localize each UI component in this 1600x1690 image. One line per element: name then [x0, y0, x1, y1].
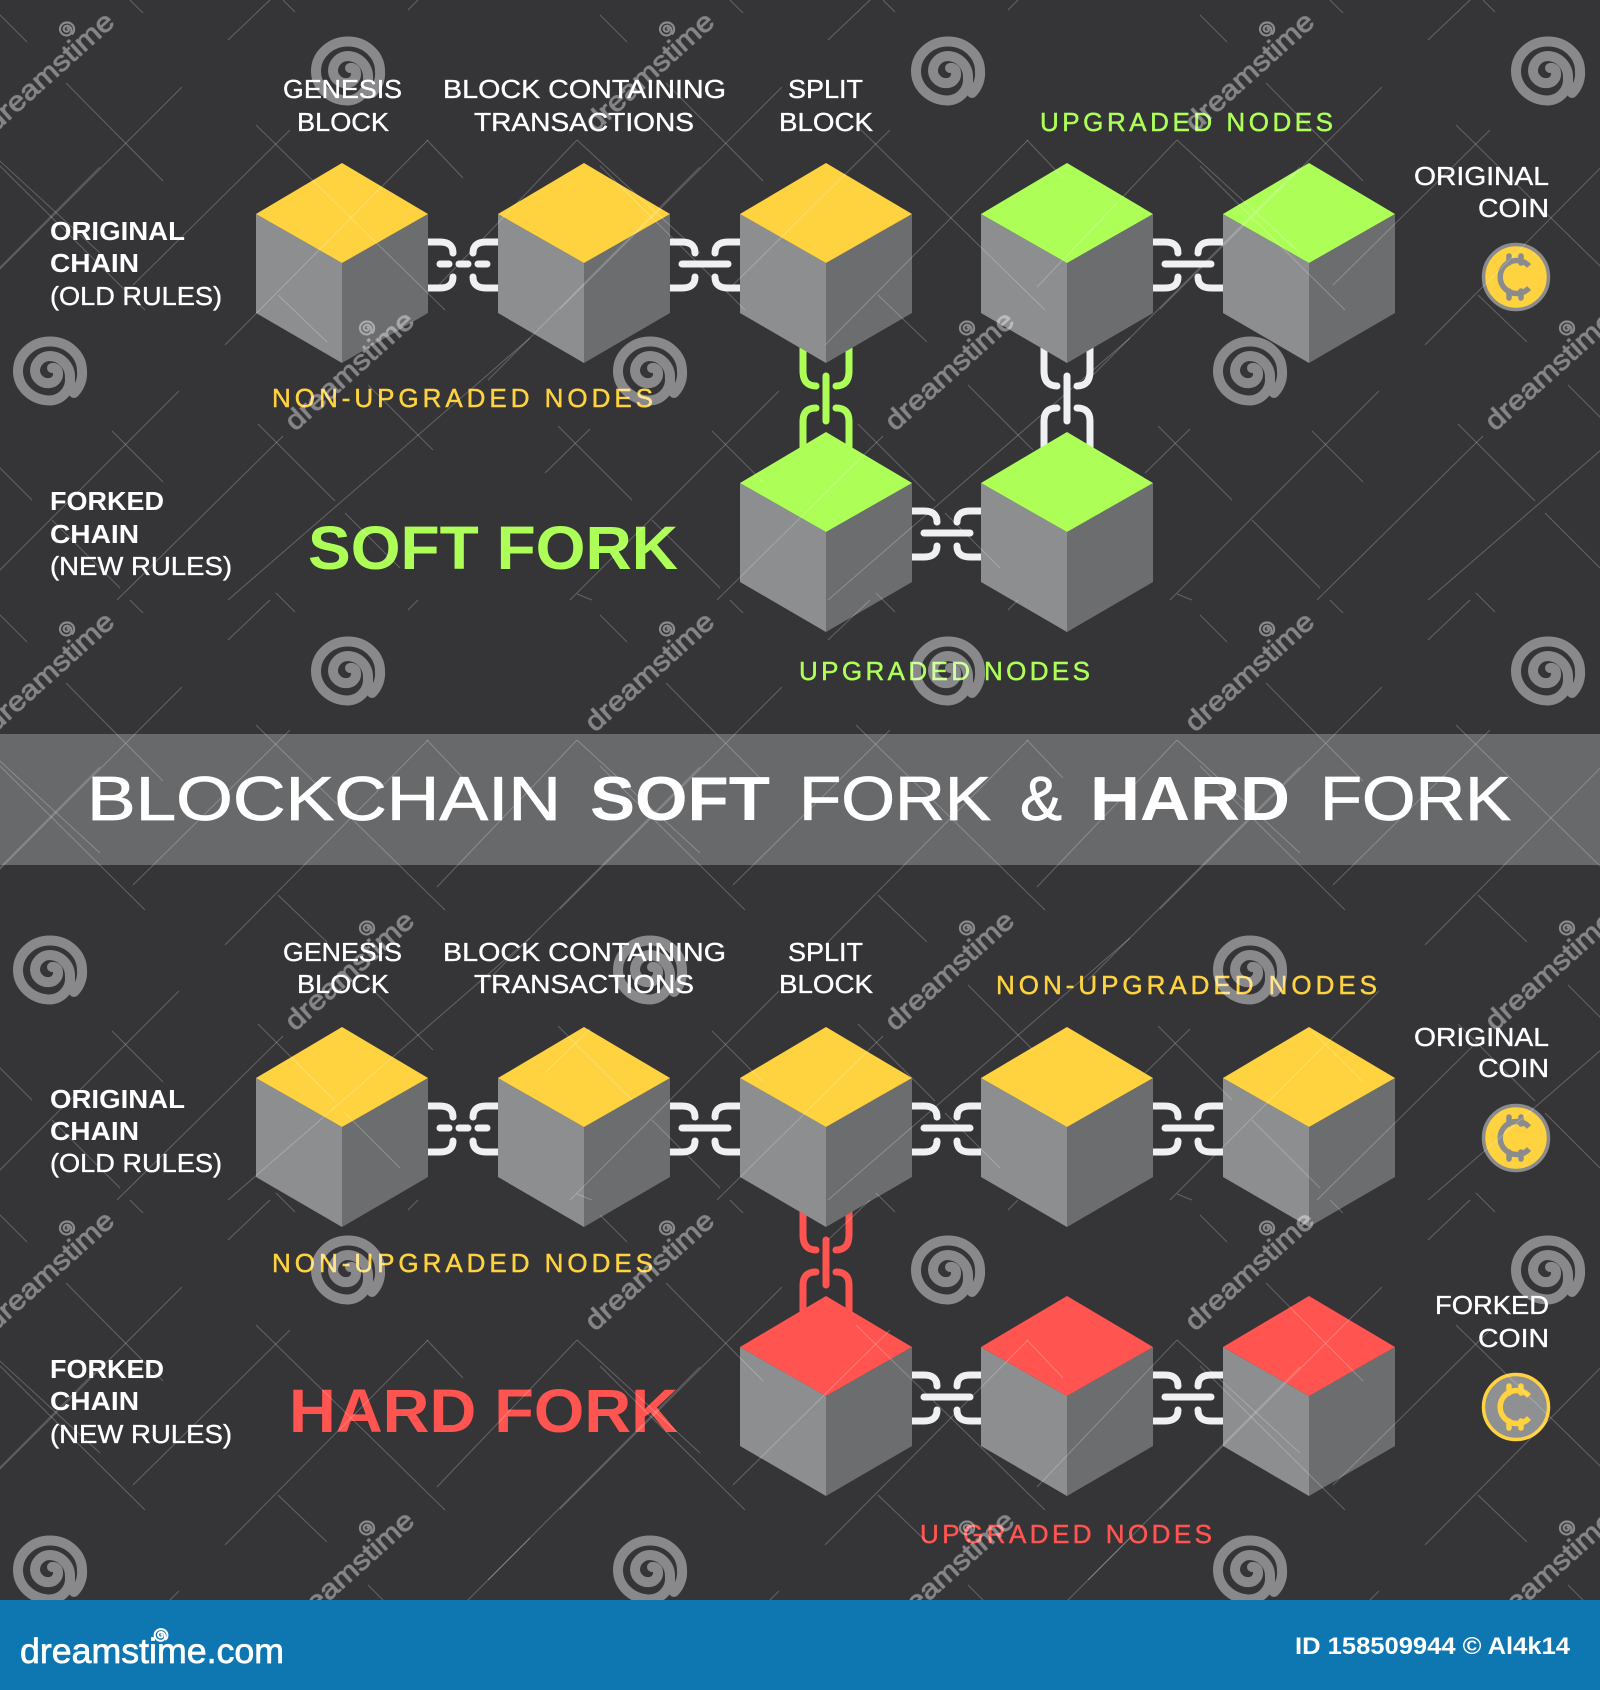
- coin label: original coin, soft fork: COIN: [1478, 195, 1549, 223]
- coin label: original coin, soft fork: ORIGINAL: [1414, 163, 1549, 191]
- watermark overlay: dreamstime: [1178, 1204, 1320, 1336]
- row label: original chain, hard fork: (OLD RULES): [50, 1150, 222, 1178]
- row label: forked chain, soft fork: CHAIN: [50, 521, 139, 549]
- row label: original chain, soft fork: ORIGINAL: [50, 218, 185, 246]
- column labels: soft fork: GENESIS: [283, 76, 402, 104]
- heading: soft fork: SOFT FORK: [308, 514, 678, 582]
- watermark overlay: dreamstime: [578, 1204, 720, 1336]
- title: [87, 765, 1511, 834]
- column labels: hard fork: GENESIS: [283, 939, 402, 967]
- node label: upgraded nodes bottom, soft fork: UPGRADED NODES: [799, 656, 1090, 686]
- watermark overlay: dreamstime: [1178, 5, 1320, 137]
- diagram: hard fork: [256, 1027, 1395, 1496]
- cubes: forked chain, soft fork: [740, 432, 1153, 632]
- row label: original chain, hard fork: ORIGINAL: [50, 1086, 185, 1114]
- title: HARD: [1090, 765, 1290, 834]
- watermark overlay: dreamstime: [578, 5, 720, 137]
- icon: original coin, hard fork: [1484, 1106, 1548, 1170]
- cubes: forked chain, hard fork: [740, 1296, 1395, 1496]
- title band: [0, 734, 1600, 865]
- column labels: soft fork: BLOCK: [297, 109, 389, 137]
- icon: original coin, soft fork: [1484, 244, 1548, 310]
- watermark overlay: dreamstime: [878, 1504, 1020, 1636]
- diagram: soft fork: [256, 163, 1395, 632]
- chain links: soft fork: [426, 242, 1225, 557]
- column labels: hard fork: BLOCK: [297, 971, 389, 999]
- watermark overlay: dreamstime: [878, 904, 1020, 1036]
- footer logo: dreamstime.com: [20, 1632, 284, 1671]
- node label: upgraded nodes, hard fork: UPGRADED NODES: [920, 1519, 1212, 1549]
- coin label: forked coin: [1435, 1292, 1549, 1353]
- icon: forked coin: [1484, 1374, 1548, 1440]
- cubes: original chain, hard fork: [256, 1027, 1395, 1227]
- row label: forked chain, hard fork: [50, 1356, 232, 1449]
- column labels: soft fork: SPLIT: [788, 76, 863, 104]
- row label: original chain, hard fork: CHAIN: [50, 1118, 139, 1146]
- cubes: original chain, soft fork: [256, 163, 1395, 363]
- coin label: original coin, hard fork: [1414, 1024, 1549, 1083]
- coin label: original coin, hard fork: ORIGINAL: [1414, 1024, 1549, 1052]
- title: SOFT: [590, 765, 770, 834]
- column labels: hard fork: SPLIT: [788, 939, 863, 967]
- row label: original chain, soft fork: [50, 218, 222, 311]
- title: &: [1020, 765, 1062, 834]
- node label: non-upgraded nodes, soft fork: NON-UPGRADED NODES: [272, 383, 653, 413]
- column labels: soft fork: BLOCK CONTAINING: [443, 76, 726, 104]
- row label: original chain, soft fork: CHAIN: [50, 250, 139, 278]
- column labels: hard fork: [283, 939, 873, 999]
- title: BLOCKCHAIN: [87, 765, 561, 834]
- title: FORK: [1320, 765, 1511, 834]
- coin label: original coin, soft fork: [1414, 163, 1549, 223]
- row label: forked chain, hard fork: CHAIN: [50, 1388, 139, 1416]
- coin label: forked coin: COIN: [1478, 1325, 1549, 1353]
- column labels: soft fork: [283, 76, 873, 137]
- watermark overlay: dreamstime: [278, 904, 420, 1036]
- row label: forked chain, hard fork: (NEW RULES): [50, 1421, 232, 1449]
- column labels: soft fork: TRANSACTIONS: [474, 109, 694, 137]
- column labels: soft fork: BLOCK: [779, 109, 873, 137]
- node label: non-upgraded nodes top, hard fork: NON-UPGRADED NODES: [996, 970, 1377, 1000]
- chain links: hard fork: [426, 1106, 1225, 1421]
- watermark overlay: dreamstime: [878, 304, 1020, 436]
- row label: original chain, soft fork: (OLD RULES): [50, 283, 222, 311]
- coin label: original coin, hard fork: COIN: [1478, 1055, 1549, 1083]
- coin label: forked coin: FORKED: [1435, 1292, 1549, 1320]
- watermark overlay: dreamstime: [278, 1504, 420, 1636]
- title: FORK: [799, 765, 991, 834]
- row label: forked chain, soft fork: FORKED: [50, 488, 164, 516]
- footer image id: ID 158509944 © Al4k14: [1295, 1633, 1571, 1660]
- column labels: hard fork: BLOCK CONTAINING: [443, 939, 726, 967]
- column labels: hard fork: TRANSACTIONS: [474, 971, 694, 999]
- row label: forked chain, soft fork: (NEW RULES): [50, 553, 232, 581]
- watermark overlay: dreamstime: [578, 605, 720, 737]
- row label: original chain, hard fork: [50, 1086, 222, 1178]
- node label: non-upgraded nodes, hard fork: NON-UPGRADED NODES: [272, 1248, 653, 1278]
- row label: forked chain, hard fork: FORKED: [50, 1356, 164, 1384]
- node label: upgraded nodes top: UPGRADED NODES: [1040, 107, 1333, 137]
- column labels: hard fork: BLOCK: [779, 971, 873, 999]
- watermark overlay: dreamstime: [1178, 605, 1320, 737]
- footer bar: [0, 1600, 1600, 1690]
- row label: forked chain, soft fork: [50, 488, 232, 581]
- heading: hard fork: HARD FORK: [289, 1377, 678, 1445]
- watermark overlay: dreamstime: [278, 304, 420, 436]
